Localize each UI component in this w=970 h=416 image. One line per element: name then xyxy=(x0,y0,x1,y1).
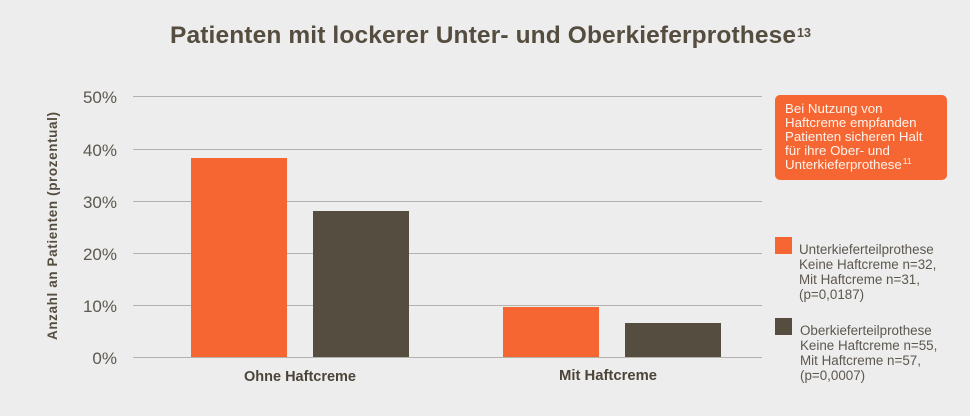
bar: Mit Haftcreme Unterkiefer xyxy=(503,307,599,357)
title: Patienten mit lockerer Unter- und Oberkieferprothese xyxy=(170,22,796,49)
legend: Unterkieferteilprothese: Unterkieferteilprothese xyxy=(799,242,934,257)
bar: Ohne Haftcreme Oberkiefer xyxy=(313,211,409,357)
legend: Oberkieferteilprothese: Mit Haftcreme n=57, xyxy=(800,353,921,368)
y axis tick labels: 40% xyxy=(83,141,117,160)
y axis tick labels: 20% xyxy=(83,245,117,264)
bar: Ohne Haftcreme Unterkiefer xyxy=(191,158,287,357)
legend: Oberkieferteilprothese xyxy=(775,318,937,383)
bar chart xyxy=(45,88,762,385)
x axis label: Mit Haftcreme: Mit Haftcreme xyxy=(559,368,657,384)
legend: Unterkieferteilprothese: Keine Haftcreme n=32, xyxy=(799,257,936,272)
callout: Unterkieferprothese xyxy=(785,157,902,172)
y axis tick labels xyxy=(83,88,117,368)
callout: Patienten sicheren Halt xyxy=(785,129,923,144)
y axis title: Anzahl an Patienten (prozentual) xyxy=(45,112,60,340)
y axis tick labels: 10% xyxy=(83,297,117,316)
y axis tick labels: 50% xyxy=(83,88,117,107)
legend: Unterkieferteilprothese: Mit Haftcreme n=31, xyxy=(799,272,920,287)
x axis label: Ohne Haftcreme: Ohne Haftcreme xyxy=(244,369,356,385)
legend: Oberkieferteilprothese: Keine Haftcreme n=55, xyxy=(800,338,937,353)
legend: Unterkieferteilprothese xyxy=(775,237,936,302)
y axis tick labels: 30% xyxy=(83,193,117,212)
callout: Haftcreme empfanden xyxy=(785,115,917,130)
title: 13 xyxy=(797,26,811,40)
callout xyxy=(775,95,947,180)
callout: für ihre Ober- und xyxy=(785,143,890,158)
legend: Unterkieferteilprothese: (p=0,0187) xyxy=(799,287,864,302)
legend: Oberkieferteilprothese: Oberkieferteilprothese xyxy=(800,323,932,338)
bar: Mit Haftcreme Oberkiefer xyxy=(625,323,721,357)
y axis tick labels: 0% xyxy=(92,349,117,368)
callout: Bei Nutzung von xyxy=(785,101,883,116)
callout: 11 xyxy=(903,156,912,166)
legend: Oberkieferteilprothese: (p=0,0007) xyxy=(800,368,865,383)
